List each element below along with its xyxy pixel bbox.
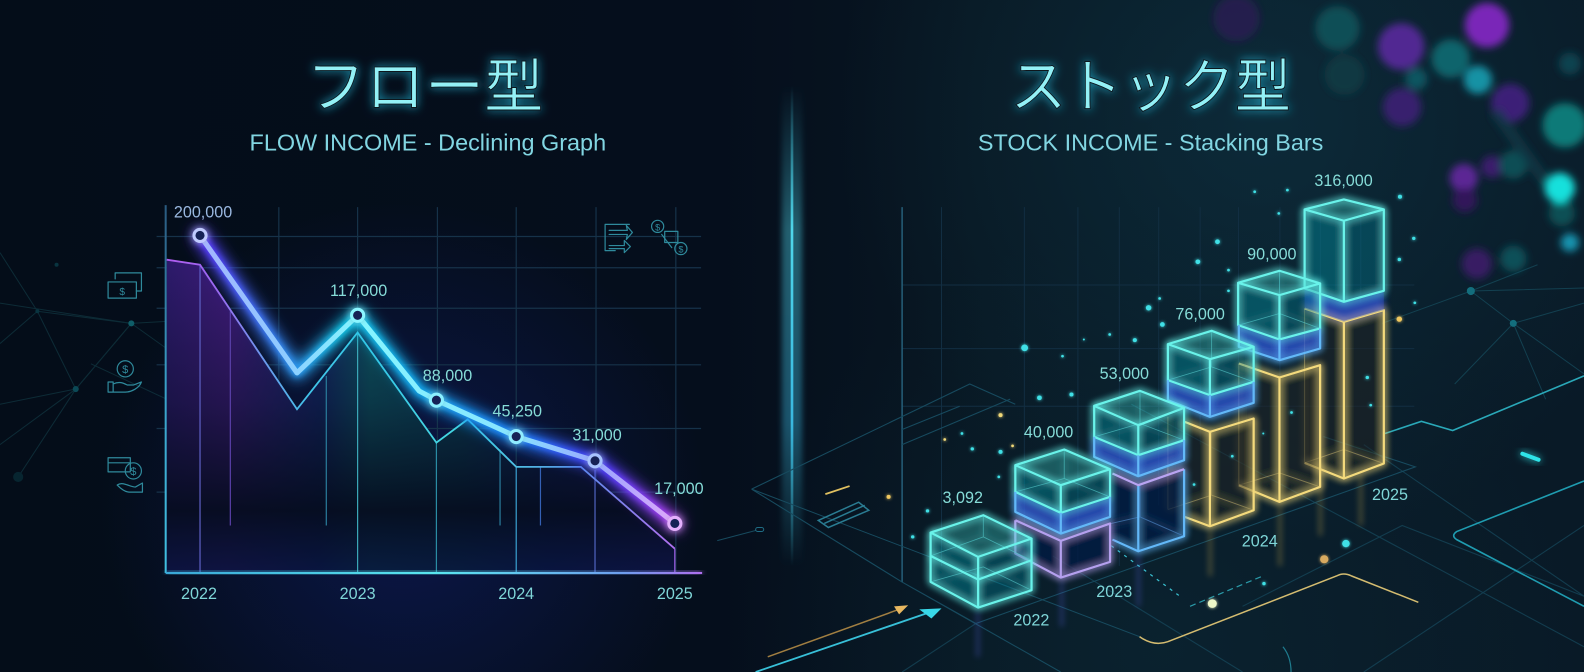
subtitle: flow: FLOW INCOME - Declining Graph — [250, 130, 606, 156]
right network decoration — [1382, 265, 1584, 399]
icon: money exchange — [652, 220, 687, 255]
year labels: 2022 — [181, 585, 217, 603]
year labels — [1013, 486, 1408, 630]
background bokeh lights — [1213, 0, 1584, 279]
year labels: 2025 — [657, 585, 693, 603]
chart grid — [157, 207, 701, 573]
year labels: 2024 — [498, 585, 534, 603]
year labels: 2025 — [1372, 486, 1408, 504]
panel: flow income line chart — [157, 203, 704, 603]
arrow: gold — [768, 605, 908, 657]
particles — [887, 189, 1416, 608]
bar 2022a — [931, 515, 1032, 608]
axes — [166, 205, 702, 574]
icon: hand with coin — [108, 361, 141, 392]
bar 2023 — [1094, 391, 1184, 551]
arrow: cyan — [756, 608, 942, 672]
year labels: 2023 — [1096, 583, 1132, 601]
value labels: 17,000 — [654, 480, 704, 498]
year labels: 2024 — [1242, 533, 1278, 551]
icon: money exchange: $ — [678, 245, 683, 255]
central divider — [782, 86, 802, 566]
value labels: 45,250 — [493, 402, 542, 420]
value labels: 117,000 — [330, 282, 387, 300]
icon: banknotes — [108, 273, 141, 298]
value labels: 88,000 — [423, 367, 472, 385]
title: flow: フロー型 — [306, 55, 543, 120]
gold light reflections — [978, 475, 1361, 657]
left network decoration — [0, 253, 167, 482]
bar 2022b — [1015, 450, 1110, 578]
value labels: 90,000 — [1247, 246, 1297, 264]
bar 2024a — [1168, 331, 1254, 526]
value labels: 316,000 — [1314, 172, 1373, 190]
bar 2025 — [1305, 199, 1384, 479]
year labels: 2023 — [340, 585, 376, 603]
second thin line — [167, 260, 675, 549]
value labels: 40,000 — [1024, 424, 1073, 442]
icon: card and coin in hand: $ — [130, 466, 136, 478]
value labels: 76,000 — [1175, 305, 1225, 323]
value labels — [943, 172, 1373, 507]
data points — [194, 229, 681, 530]
main declining line — [200, 235, 675, 523]
value labels: 31,000 — [572, 427, 622, 445]
subtitle: stock: STOCK INCOME - Stacking Bars — [978, 130, 1323, 156]
value labels: 3,092 — [943, 489, 983, 507]
year labels — [181, 585, 693, 603]
title: stock: ストック型 — [1010, 55, 1291, 120]
icon: document with arrows — [605, 224, 632, 253]
icon: banknotes: $ — [119, 287, 125, 298]
value labels — [174, 203, 704, 498]
bar 2024b — [1238, 271, 1320, 502]
year labels: 2022 — [1013, 612, 1049, 630]
panel: stock income stacked bars — [717, 172, 1584, 672]
icon: hand with coin: $ — [122, 364, 128, 376]
icon: card and coin in hand — [108, 458, 142, 492]
value labels: 53,000 — [1100, 365, 1149, 383]
bars in isometric layout — [931, 199, 1384, 608]
value labels: 200,000 — [174, 203, 232, 221]
icon: money exchange: $ — [655, 222, 660, 232]
drop lines — [200, 265, 675, 573]
floor and circuit lines — [717, 207, 1584, 672]
area under second line — [167, 260, 675, 573]
